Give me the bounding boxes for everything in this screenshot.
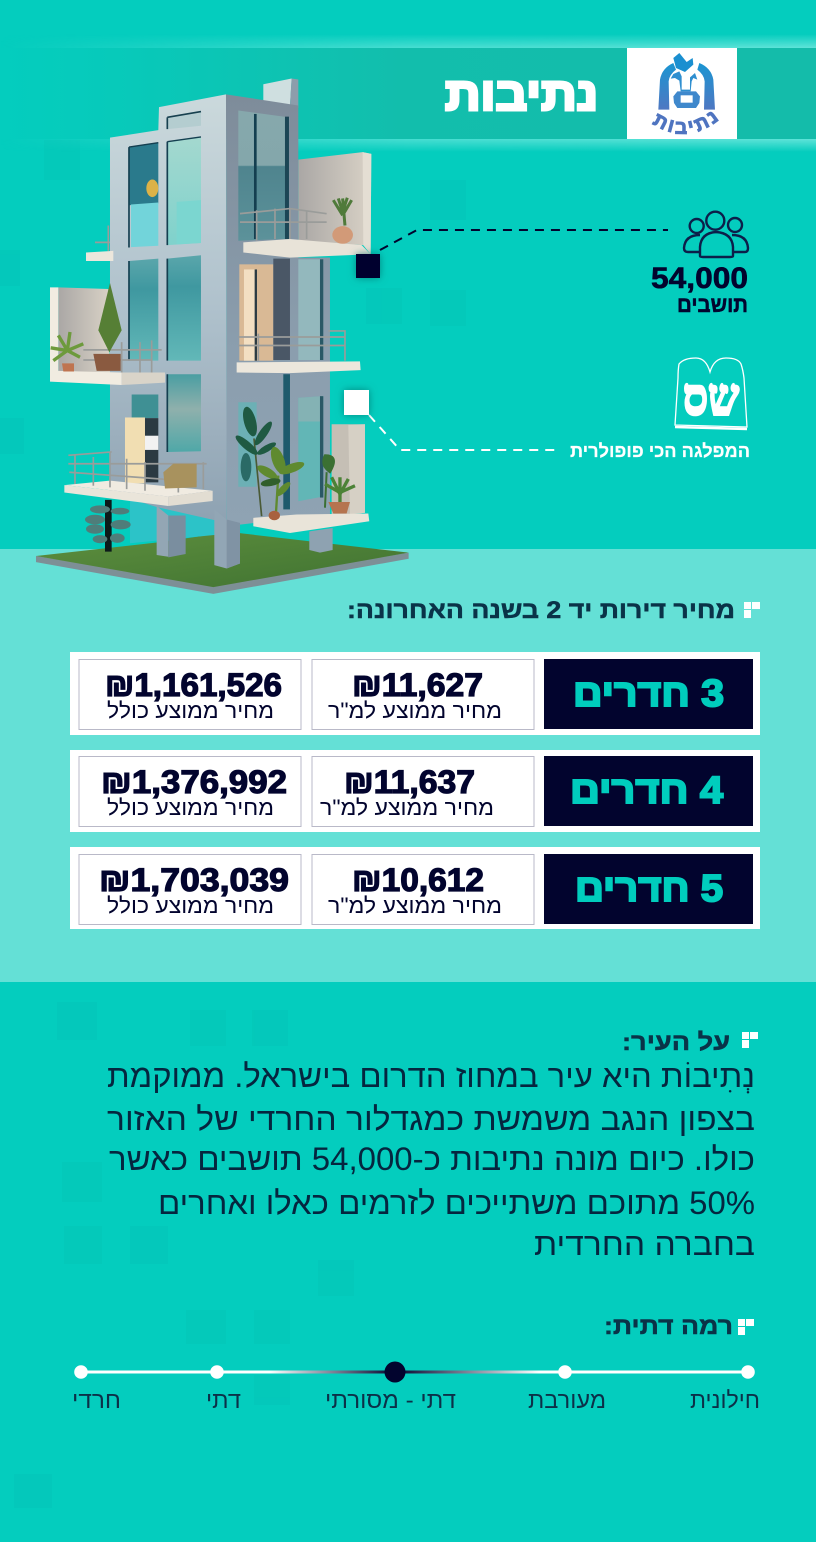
room label [544, 659, 753, 729]
text block: about the city: בצפון הנגב משמשת כמגדלור החרדי של האזור [107, 1101, 755, 1137]
callout: party marker and dashed line [344, 390, 558, 450]
average price: ₪1,376,992 [101, 764, 287, 800]
chart: religious level scale: דתי [206, 1387, 241, 1413]
text block: about the city [107, 1058, 755, 1262]
price per sqm: ₪10,612 [352, 862, 484, 898]
price per sqm: מחיר ממוצע למ"ר [320, 795, 494, 820]
price per sqm: מחיר ממוצע למ"ר [328, 893, 502, 918]
header band [0, 34, 816, 152]
chimney [263, 78, 298, 108]
price per sqm [312, 756, 534, 826]
room label [544, 854, 753, 924]
room label: 4 חדרים [570, 770, 723, 812]
background: top section [0, 0, 816, 549]
left face [110, 94, 227, 523]
title: נתיבות [445, 68, 598, 120]
stat: popular party: המפלגה הכי פופולרית [570, 440, 750, 461]
callout: residents marker and dashed line [356, 230, 668, 278]
stat: residents [651, 262, 748, 317]
chart: religious level scale: דתי - מסורתי [325, 1387, 456, 1413]
panel: prices background [0, 549, 816, 982]
icon: Shas party logo: שס [683, 370, 739, 427]
chart: religious level scale: מעורבת [528, 1387, 606, 1413]
balcony slabs [50, 239, 371, 569]
logo: city emblem: נתיבות [652, 112, 719, 134]
icon: people [684, 212, 748, 257]
price per sqm: ₪11,637 [344, 764, 475, 800]
average price: ₪1,703,039 [99, 862, 289, 898]
average price [79, 854, 301, 924]
price per sqm: מחיר ממוצע למ"ר [328, 698, 502, 723]
left windows [129, 112, 201, 452]
text block: about the city: 50% מתוכם משתייכים לזרמים כאלו ואחרים [158, 1185, 755, 1221]
plants [51, 180, 355, 552]
building illustration [36, 78, 409, 594]
room label: 3 חדרים [573, 673, 724, 715]
right windows [238, 111, 323, 509]
railings [68, 209, 345, 492]
right wing rear wall [298, 152, 371, 254]
heading: religious level: רמה דתית: [604, 1313, 733, 1340]
chart: religious level scale: חרדי [72, 1387, 121, 1413]
row: 4 rooms [70, 750, 760, 832]
average price: ₪1,161,526 [105, 667, 282, 703]
ground platform [36, 499, 409, 594]
background: bottom section [0, 982, 816, 1542]
right face [226, 94, 330, 525]
text block: about the city: בחברה החרדית [534, 1226, 755, 1262]
room label [544, 756, 753, 826]
text block: about the city: נְתִיבוֹת היא עיר במחוז הדרום בישראל. ממוקמת [107, 1058, 755, 1094]
average price: מחיר ממוצע כולל [107, 795, 274, 820]
stat: residents: תושבים [677, 292, 748, 317]
chart: religious level scale: חילונית [690, 1387, 760, 1413]
row: 3 rooms [70, 652, 760, 735]
room label: 5 חדרים [575, 868, 723, 910]
icon: Shas party logo [675, 358, 747, 429]
average price: מחיר ממוצע כולל [107, 698, 274, 723]
row: 5 rooms [70, 847, 760, 929]
heading: apartment prices: מחיר דירות יד 2 בשנה האחרונה: [347, 597, 735, 624]
price per sqm [312, 854, 534, 924]
average price [79, 756, 301, 826]
price per sqm [312, 660, 534, 730]
stat: residents: 54,000 [651, 262, 748, 295]
text block: about the city: כולו. כיום מונה נתיבות כ-54,000 תושבים כאשר [109, 1141, 755, 1177]
logo: city emblem [627, 48, 737, 139]
average price [79, 660, 301, 730]
price per sqm: ₪11,627 [352, 667, 483, 703]
chart: religious level scale [72, 1362, 760, 1413]
average price: מחיר ממוצע כולל [107, 893, 274, 918]
door and kitchen [125, 417, 158, 483]
heading: about the city: על העיר: [622, 1029, 730, 1056]
